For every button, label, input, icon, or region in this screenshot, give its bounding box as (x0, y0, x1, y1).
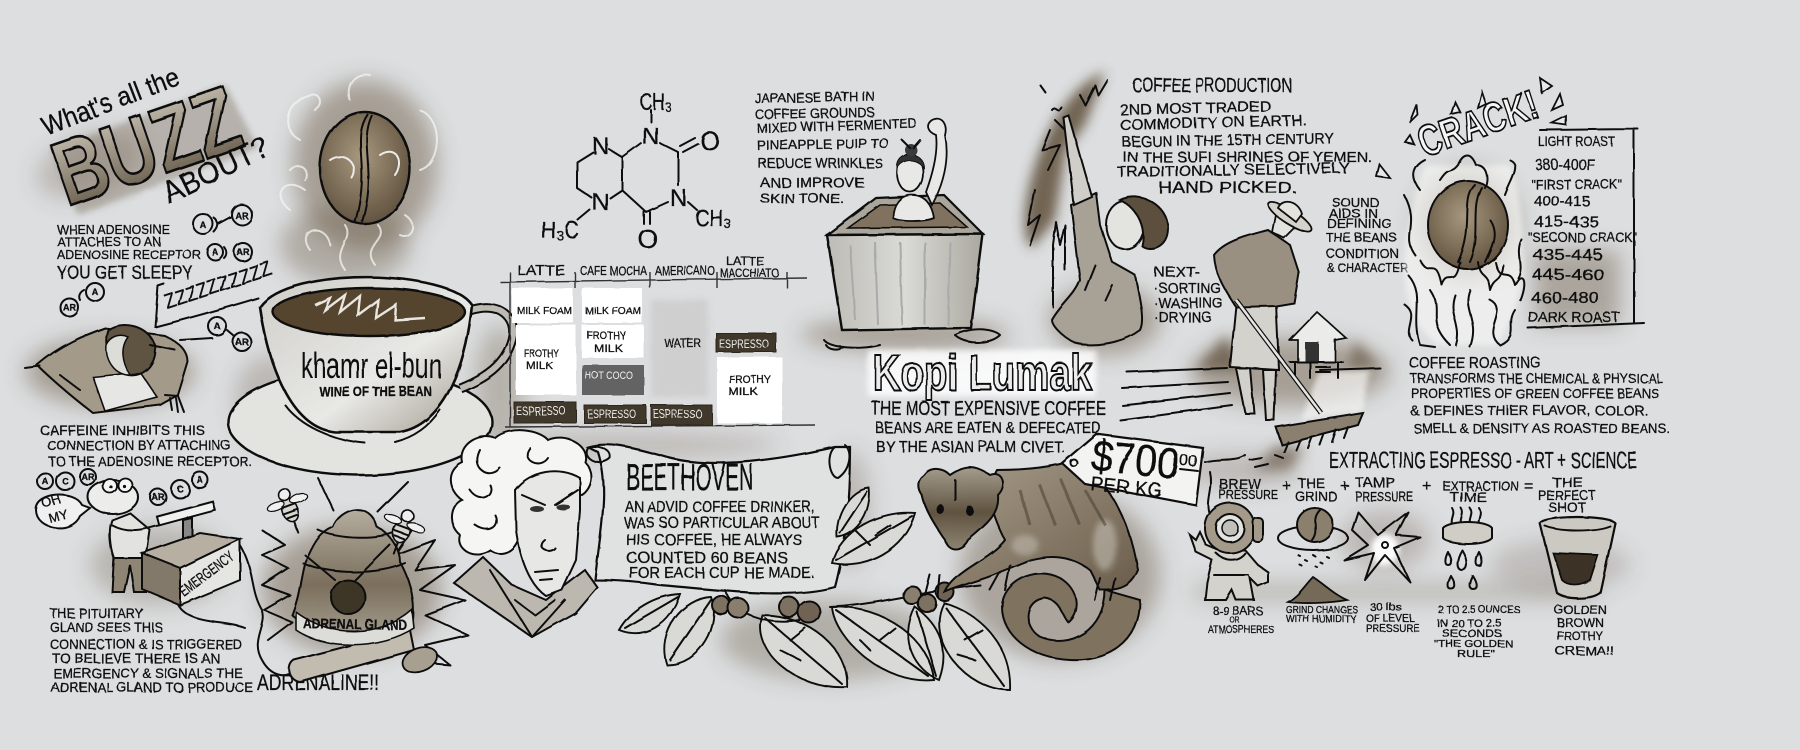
price tag: 00 (1179, 452, 1198, 471)
icon: espresso shot glass (1540, 517, 1615, 598)
saucer (228, 369, 492, 475)
about: ABOUT? (157, 129, 275, 210)
caffeine molecule structure: CH₃ (640, 89, 672, 116)
espresso captions: 30 lbs (1370, 602, 1403, 614)
text: adenosine explanation: WHEN ADENOSINE (57, 222, 170, 237)
espresso captions: WITH HUMIDITY (1286, 614, 1356, 625)
label band: adrenal gland (296, 610, 414, 645)
espresso captions: GOLDEN (1554, 603, 1607, 617)
column: americano: WATER (664, 336, 701, 350)
buzz: BUZZ (40, 68, 253, 226)
next steps text: ·WASHING (1154, 295, 1223, 312)
pituitary text: CONNECTION & IS TRIGGERED (50, 636, 242, 652)
coffee roasting text: COFFEE ROASTING (1409, 355, 1541, 372)
column: cafe mocha: MILK FOAM (585, 305, 641, 317)
price tag: PER KG (1089, 473, 1163, 502)
text: adenosine explanation: ADENOSINE RECEPTOR (57, 247, 201, 262)
caffeine molecule structure: O (638, 224, 658, 254)
japanese bath text: AND IMPROVE (760, 175, 864, 190)
caffeine text: CAFFEINE INHIBITS THIS (40, 423, 205, 438)
table headers: LATTE (517, 262, 565, 279)
crack label with sparks (1376, 78, 1566, 178)
pituitary text: TO BELIEVE THERE IS AN (52, 650, 220, 666)
molecules: adenosine and receptor pairs: C (177, 484, 184, 494)
head (919, 468, 1003, 549)
column: cafe mocha: MILK (594, 343, 624, 355)
caffeine text: TO THE ADENOSINE RECEPTOR. (48, 454, 252, 469)
coffee production text: 2ND MOST TRADED (1120, 98, 1271, 119)
japanese bath text: COFFEE GROUNDS (755, 105, 875, 122)
roast temperature scale: LIGHT ROAST (1538, 133, 1615, 149)
sound text: AIDS IN (1329, 206, 1378, 221)
cup body (260, 277, 472, 432)
espresso equation labels: THE (1298, 475, 1325, 491)
roast temperature scale: 400-415 (1534, 193, 1590, 210)
coffee production text: BEGUN IN THE 15TH CENTURY (1122, 130, 1334, 151)
coffee roasting text (1409, 355, 1670, 436)
caffeine molecule structure: H₃C (541, 217, 579, 244)
text: adenosine explanation: ATTACHES TO AN (57, 234, 161, 249)
body (945, 460, 1138, 592)
extracting espresso heading: EXTRACTING ESPRESSO - ART + SCIENCE (1329, 447, 1637, 473)
column: latte: ESPRESSO (516, 404, 566, 418)
icon: tamp pressure burst (1344, 512, 1420, 582)
espresso captions: CREMA!! (1555, 644, 1614, 658)
speech bubble: zzz: ZZZZZZZZZZ (161, 257, 275, 314)
text: adenosine explanation: YOU GET SLEEPY (57, 263, 193, 283)
espresso equation labels: SHOT (1548, 499, 1586, 515)
illustration: coffee cup and saucer (228, 277, 513, 475)
espresso equation labels: + (1340, 478, 1349, 495)
espresso captions: SECONDS (1442, 628, 1502, 640)
espresso equation labels: PRESSURE (1355, 488, 1413, 504)
espresso captions: IN 20 TO 2.5 (1437, 618, 1502, 630)
icon: bean grinding into grounds (1278, 508, 1348, 603)
illustration: floating coffee bean (281, 75, 437, 270)
roast temperature scale: "SECOND CRACK" (1528, 229, 1637, 245)
coffee roasting text: PROPERTIES OF GREEN COFFEE BEANS (1411, 385, 1659, 401)
espresso equation labels: BREW (1219, 476, 1262, 493)
molecules: adenosine and receptor pairs: A (197, 475, 204, 485)
what's all the: What's all the (37, 62, 184, 142)
illustration: coffee branch with leaves and cherries (619, 488, 1010, 690)
kopi lumak text: BEANS ARE EATEN & DEFECATED (875, 420, 1101, 437)
pituitary text: EMERGENCY & SIGNALS THE (53, 665, 243, 681)
coffee roasting text: SMELL & DENSITY AS ROASTED BEANS. (1413, 420, 1670, 436)
column: americano (651, 300, 712, 425)
sound text (1326, 195, 1408, 275)
espresso captions: OR (1230, 616, 1240, 625)
espresso equation labels: TIME (1450, 489, 1487, 505)
espresso equation labels: + (1422, 478, 1431, 495)
caffeine molecule structure: O (700, 126, 720, 156)
kopi lumak heading: Kopi Lumak (873, 345, 1092, 401)
espresso captions (1208, 602, 1614, 660)
illustration: adrenal gland with bees (262, 436, 468, 682)
icon: extraction time puck and drops (1443, 508, 1492, 589)
caffeine molecule structure (541, 89, 731, 254)
japanese bath text: PINEAPPLE PUIP TO (757, 136, 889, 153)
kopi lumak text (871, 398, 1106, 456)
speech bubble: oh my: MY (47, 506, 70, 526)
pituitary text: ADRENAL GLAND TO PRODUCE (51, 679, 253, 695)
caffeine text: CONNECTION BY ATTACHING (47, 438, 231, 453)
jacket (454, 557, 597, 637)
scroll: beethoven note: FOR EACH CUP HE MADE. (629, 565, 815, 582)
espresso captions: RULE" (1457, 649, 1496, 660)
illustration: asian palm civet (919, 460, 1140, 660)
roast temperature scale: 445-460 (1532, 267, 1604, 284)
coffee production text: COFFEE PRODUCTION (1132, 75, 1292, 97)
kopi lumak text: BY THE ASIAN PALM CIVET. (876, 439, 1065, 456)
darker close wash (1024, 72, 1380, 470)
box: emergency (142, 533, 240, 605)
table headers: AMERICANO (655, 263, 715, 278)
molecules: adenosine and receptor pairs: A (214, 321, 221, 331)
caffeine molecule structure: CH₃ (695, 205, 731, 232)
espresso captions: ATMOSPHERES (1208, 624, 1274, 636)
column: cafe mocha: ESPRESSO (587, 407, 636, 421)
pituitary text: THE PITUITARY (50, 605, 144, 621)
title: what's all the buzz about (37, 62, 275, 226)
molecules: adenosine and receptor pairs: C (62, 476, 69, 486)
molecules: adenosine and receptor pairs: AR (82, 472, 95, 482)
column: latte: MILK (526, 360, 554, 372)
illustration: woman picking coffee (1028, 80, 1168, 345)
espresso captions: FROTHY (1557, 629, 1603, 643)
crack label with sparks: CRACK! (1412, 81, 1544, 166)
column: latte macchiato: ESPRESSO (719, 337, 769, 351)
molecules: adenosine and receptor pairs: AR (236, 211, 249, 221)
handle (460, 308, 513, 388)
japanese bath text: SKIN TONE. (760, 191, 844, 206)
espresso captions: PRESSURE (1366, 623, 1420, 635)
caffeine molecule structure: N (592, 189, 609, 216)
chart: coffee drink composition table (500, 254, 815, 427)
coffee production text: HAND PICKED. (1158, 178, 1297, 197)
espresso equation labels: + (1282, 478, 1291, 495)
scroll: beethoven note: WAS SO PARTICULAR ABOUT (624, 515, 820, 532)
japanese bath text: MIXED WITH FERMENTED (757, 115, 917, 136)
next steps text: ·DRYING (1154, 309, 1212, 326)
woman (893, 119, 947, 221)
price tag: $700 (1089, 431, 1182, 489)
next steps text: ·SORTING (1154, 280, 1221, 297)
next steps text: NEXT- (1154, 264, 1200, 281)
column: cafe mocha: FROTHY (587, 330, 627, 342)
label: adrenal gland: ADRENAL GLAND (303, 615, 407, 633)
caffeine text (40, 423, 252, 469)
speech bubble: oh my: OH (40, 491, 63, 511)
espresso equation labels: THE (1552, 474, 1583, 490)
diver suit (1190, 532, 1268, 600)
sound text: SOUND (1332, 195, 1379, 210)
scroll: beethoven note: HIS COFFEE, HE ALWAYS (626, 532, 802, 549)
table headers (517, 254, 779, 280)
illustration: sleeping man at desk (25, 325, 212, 413)
illustration: man pushing emergency plunger (36, 478, 295, 675)
column: latte (512, 288, 576, 423)
espresso equation labels: PRESSURE (1219, 487, 1278, 502)
price tag (1062, 431, 1203, 505)
roast temperature scale: 415-435 (1534, 214, 1599, 231)
column: cafe mocha: HOT COCO (585, 370, 633, 382)
illustration: beethoven portrait (450, 430, 597, 637)
espresso equation labels (1219, 474, 1596, 515)
japanese bath text: REDUCE WRINKLES (758, 156, 883, 171)
caffeine molecule structure: N (642, 123, 659, 150)
coffee production text: TRADITIONALLY SELECTIVELY (1117, 160, 1350, 181)
speech bubble: zzz (155, 257, 275, 327)
column: latte: MILK FOAM (517, 305, 572, 317)
roast temperature scale: DARK ROAST (1528, 309, 1620, 326)
table headers: CAFE MOCHA (580, 263, 647, 278)
japanese bath text: JAPANESE BATH IN (755, 89, 875, 106)
roast temperature scale (1528, 129, 1644, 328)
espresso captions: BROWN (1557, 616, 1604, 630)
sound text: DEFINING (1327, 216, 1392, 231)
pituitary text (50, 605, 379, 695)
illustration: woman in coffee bath (824, 119, 1000, 350)
espresso equation labels: PERFECT (1538, 487, 1596, 503)
espresso captions: 2 TO 2.5 OUNCES (1438, 604, 1520, 616)
espresso captions: GRIND CHANGES (1286, 605, 1358, 616)
espresso captions: "THE GOLDEN (1434, 639, 1513, 650)
scroll: beethoven note: AN ADVID COFFEE DRINKER, (625, 499, 815, 516)
caffeine molecule structure: N (592, 133, 609, 160)
japanese bath text (755, 89, 917, 206)
espresso captions: OF LEVEL (1366, 613, 1415, 625)
molecules: adenosine and receptor pairs: A (92, 287, 99, 297)
pituitary text: GLAND SEES THIS (50, 619, 163, 635)
cup subtitle: WINE OF THE BEAN (319, 383, 432, 399)
buzz shadow (52, 85, 258, 215)
table headers: MACCHIATO (720, 266, 779, 280)
molecules: adenosine and receptor pairs: A (42, 476, 49, 486)
roast temperature scale: 460-480 (1531, 290, 1599, 307)
sound text: & CHARACTER (1327, 260, 1408, 275)
molecules: adenosine and receptor pairs: A (200, 220, 207, 230)
molecules: adenosine and receptor pairs (37, 205, 252, 505)
column: latte macchiato (716, 333, 782, 423)
text: adenosine explanation (57, 222, 201, 283)
cup label: khamr el-bun (301, 345, 442, 386)
roast temperature scale: 380-400F (1535, 157, 1595, 174)
tail (1002, 574, 1140, 660)
column: cafe mocha (582, 288, 646, 423)
coffee production text: IN THE SUFI SHRINES OF YEMEN. (1123, 149, 1372, 166)
espresso captions: 8-9 BARS (1213, 604, 1263, 618)
column: americano: ESPRESSO (653, 407, 702, 421)
roast temperature scale: 435-445 (1533, 247, 1603, 264)
coffee production text (1117, 75, 1372, 197)
hut (1290, 312, 1346, 378)
molecules: adenosine and receptor pairs: AR (152, 492, 165, 502)
column: latte macchiato: MILK (728, 386, 759, 398)
molecules: adenosine and receptor pairs: AR (236, 337, 249, 347)
table headers: LATTE (726, 254, 764, 268)
caffeine molecule structure: N (670, 185, 687, 212)
scroll: beethoven note: COUNTED 60 BEANS (626, 550, 788, 567)
scroll: beethoven note (586, 445, 850, 593)
sound text: THE BEANS (1326, 230, 1397, 245)
brown wash shading (25, 80, 1630, 680)
coffee roasting text: & DEFINES THIER FLAVOR, COLOR. (1410, 402, 1648, 418)
face (515, 471, 580, 596)
kopi lumak text: THE MOST EXPENSIVE COFFEE (871, 398, 1106, 420)
icon: deep sea diver (1190, 472, 1268, 600)
column: latte: FROTHY (524, 348, 560, 360)
speech bubble: oh my (36, 491, 90, 528)
next steps text (1154, 264, 1223, 326)
illustration: bean in flames (1404, 156, 1524, 347)
molecules: adenosine and receptor pairs: A (212, 247, 219, 257)
heading: beethoven: BEETHOVEN (626, 457, 754, 499)
coffee roasting text: TRANSFORMS THE CHEMICAL & PHYSICAL (1410, 370, 1663, 386)
pituitary text: ADRENALINE!! (257, 670, 379, 695)
espresso equation labels: TAMP (1355, 474, 1395, 490)
coffee production text: COMMODITY ON EARTH. (1120, 112, 1307, 134)
espresso equation labels: EXTRACTION (1443, 478, 1519, 494)
hair (450, 430, 591, 554)
coffee surface (273, 288, 465, 336)
illustration: farmer raking beans with hut (1120, 198, 1380, 467)
espresso equation labels: = (1524, 478, 1533, 495)
box: emergency: EMERGENCY (176, 548, 238, 600)
column: latte macchiato: FROTHY (729, 374, 772, 386)
espresso equation labels: GRIND (1295, 488, 1337, 504)
molecules: adenosine and receptor pairs: AR (62, 302, 76, 312)
roast temperature scale: "FIRST CRACK" (1531, 176, 1622, 192)
sound text: CONDITION (1326, 246, 1399, 261)
molecules: adenosine and receptor pairs: AR (236, 247, 250, 257)
